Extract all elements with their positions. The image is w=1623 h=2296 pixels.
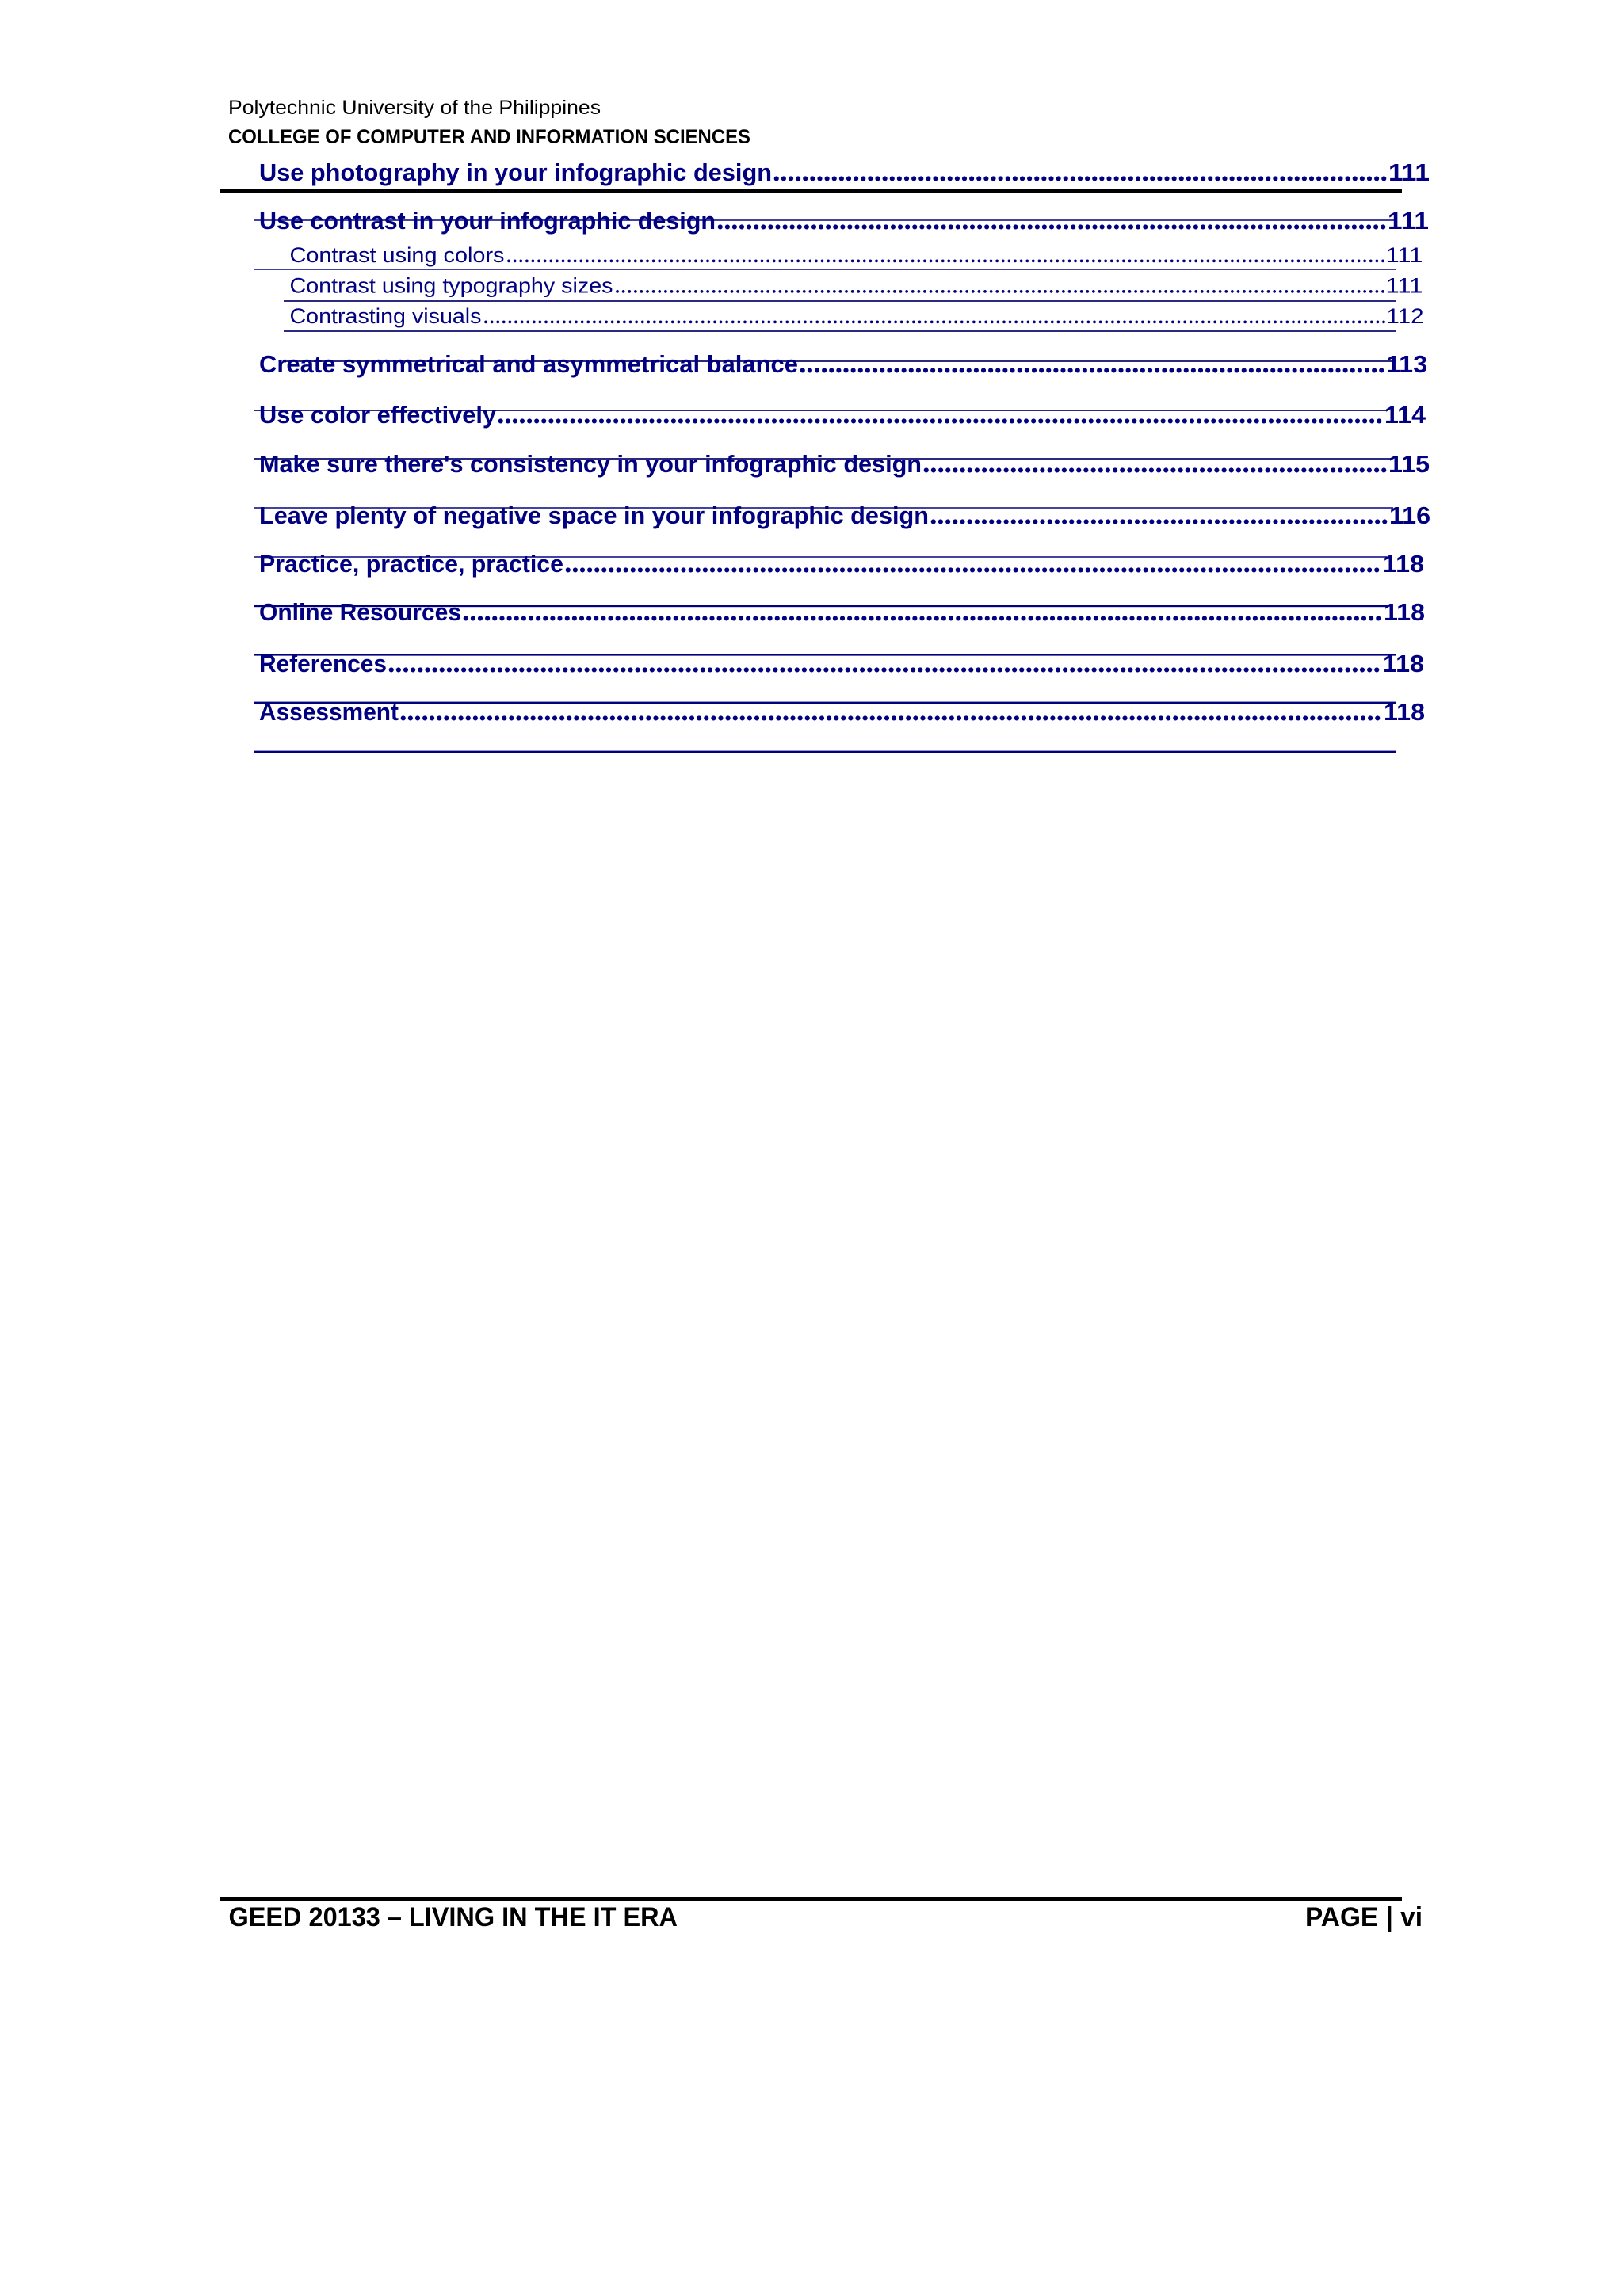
sub-entry: contrast using typography sizes: Contrast using typography sizes	[290, 274, 613, 298]
entry: use contrast	[259, 203, 1429, 236]
entry: use color effectively: ...........................................................................................................................	[497, 397, 1383, 430]
sub-entry: contrast using colors: ..................................................................................................................................................	[506, 239, 1386, 268]
entry: references: References	[259, 650, 387, 677]
header rule	[220, 189, 1402, 193]
entry: negative space: ...............................................................	[930, 498, 1388, 531]
entry: online resources: 118	[1384, 598, 1425, 626]
entry: consistency: Make sure there's consistency in your infographic design	[259, 450, 922, 478]
entry: use contrast: .............................................................................................	[716, 203, 1387, 236]
sub-entry: contrasting visuals: ......................................................................................................................................................	[483, 300, 1387, 329]
entry: symmetrical balance: Create symmetrical and asymmetrical balance	[259, 350, 798, 378]
sub-entry: contrasting visuals: 112	[1387, 304, 1423, 328]
entry: use color effectively: Use color effectively	[259, 401, 497, 429]
sub-entry: contrast using colors: 111	[1385, 243, 1423, 267]
course title: GEED 20133 – LIVING IN THE IT ERA	[228, 1902, 678, 1932]
sub-entry: contrast using typography sizes: 111	[1385, 274, 1423, 298]
entry: references: .........................................................................................................................................	[388, 646, 1381, 679]
entry: use photography	[259, 154, 1430, 188]
sub-entry: contrast using colors: Contrast using colors	[290, 243, 504, 267]
entry: practice: Practice, practice, practice	[259, 550, 563, 578]
entry: negative space: Leave plenty of negative space in your infographic design	[259, 502, 929, 529]
entry: consistency	[259, 446, 1430, 479]
entry: assessment: Assessment	[259, 698, 399, 726]
page number: PAGE | vi	[1305, 1902, 1423, 1932]
entry: use photography: Use photography in your infographic design	[259, 158, 772, 186]
entry: negative space	[259, 498, 1430, 531]
sub-entry: contrast using typography sizes: ................................................................................................................................	[614, 269, 1386, 298]
entry: symmetrical balance	[259, 346, 1427, 379]
entry: use contrast: Use contrast in your infographic design	[259, 207, 716, 235]
entry: symmetrical balance: 113	[1386, 350, 1427, 378]
table of contents list	[259, 154, 1430, 727]
sub-entry: contrasting visuals: Contrasting visuals	[290, 304, 482, 328]
college name: COLLEGE OF COMPUTER AND INFORMATION SCIENCES	[228, 126, 750, 148]
entry: references: 118	[1383, 650, 1424, 677]
entry: use contrast: 111	[1388, 207, 1429, 235]
entry: assessment: 118	[1384, 698, 1425, 726]
entry: assessment: ........................................................................................................................................	[399, 694, 1381, 727]
entry: use photography: .....................................................................................	[773, 154, 1388, 188]
entry: practice: 118	[1383, 550, 1424, 578]
entry: consistency: 115	[1388, 450, 1430, 478]
entry: online resources: ...............................................................................................................................	[462, 594, 1382, 627]
page header	[228, 97, 750, 148]
entry: online resources: Online Resources	[259, 598, 461, 626]
page footer	[228, 1902, 1423, 1932]
university name: Polytechnic University of the Philippines	[228, 97, 601, 119]
entry: use photography: 111	[1388, 158, 1430, 186]
entry: use color effectively: 114	[1384, 401, 1426, 429]
entry: negative space: 116	[1389, 502, 1430, 529]
entry: practice: .................................................................................................................	[564, 546, 1381, 579]
entry: consistency: ................................................................	[922, 446, 1388, 479]
entry: symmetrical balance: .................................................................................	[799, 346, 1385, 379]
sub-entry: contrast using typography sizes	[290, 269, 1423, 298]
footer rule	[220, 1897, 1402, 1901]
